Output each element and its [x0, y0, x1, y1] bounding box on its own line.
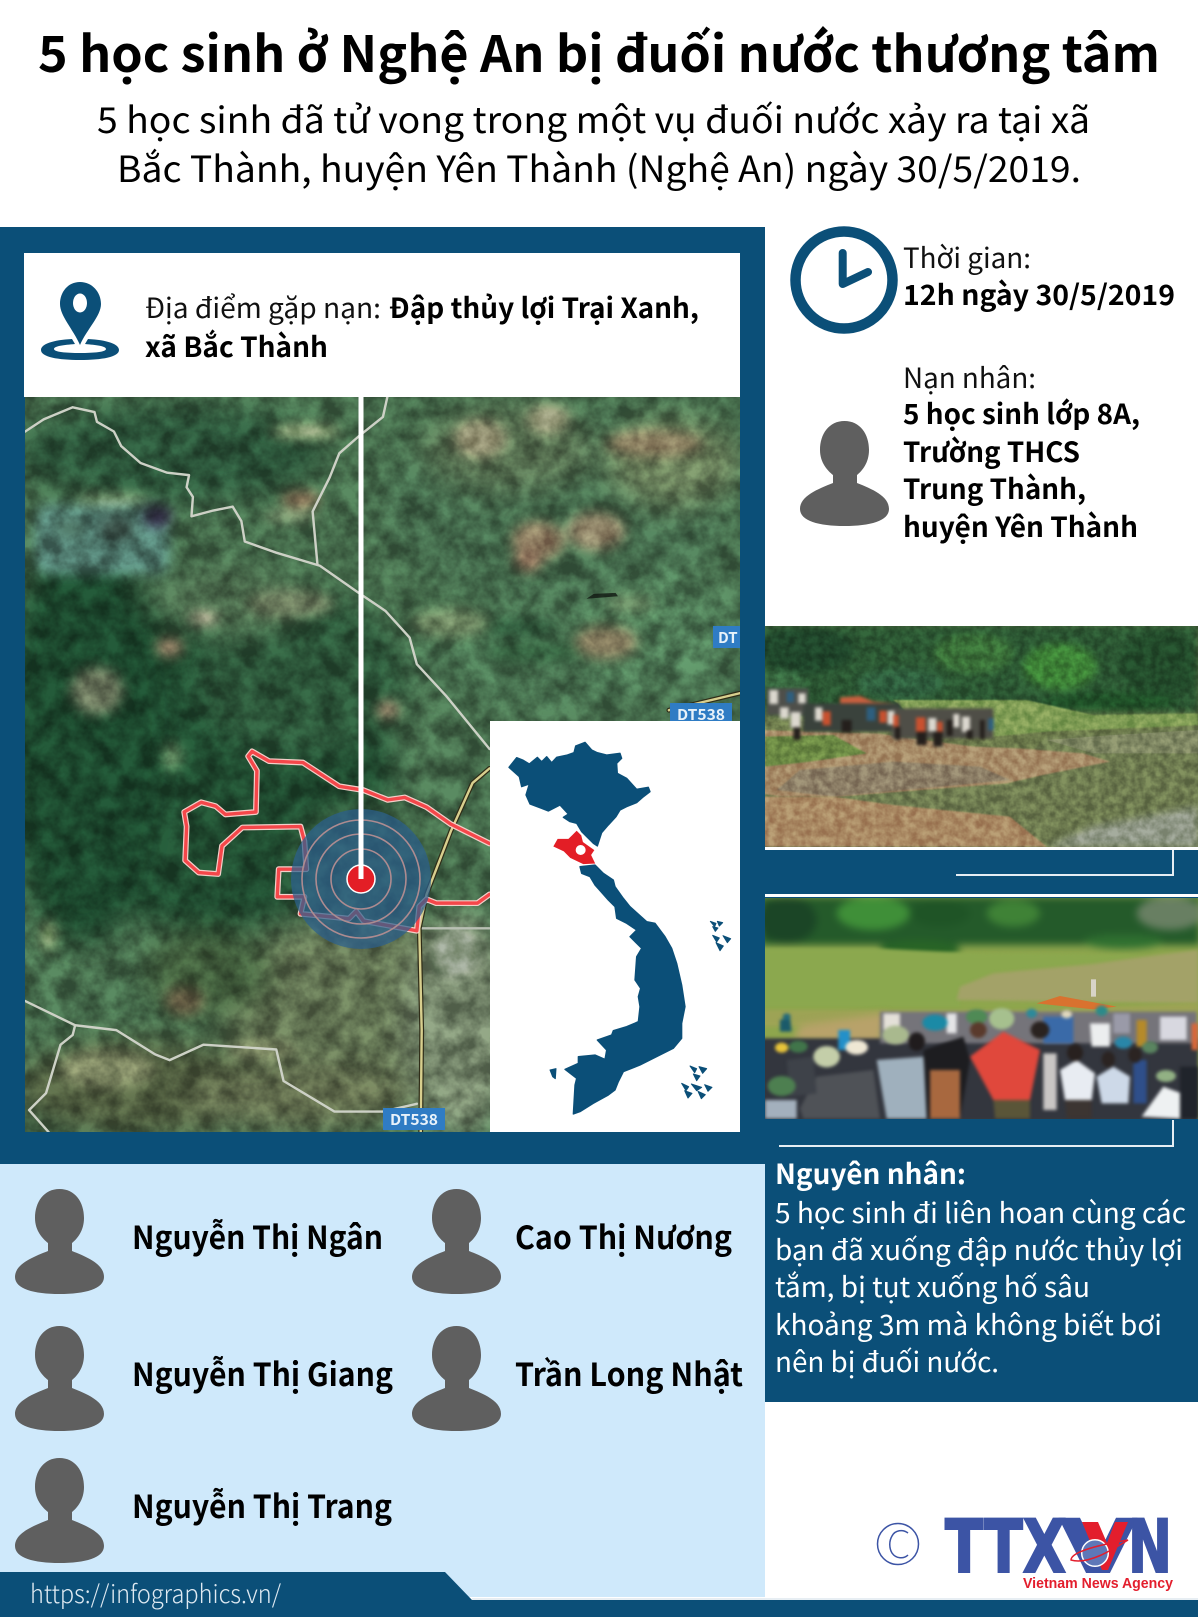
location text	[145, 287, 699, 366]
icon: victim person	[800, 421, 889, 526]
subtitle	[97, 92, 1090, 193]
victim: Cao Thị Nương	[412, 1189, 732, 1294]
victim: Nguyễn Thị Trang: Nguyễn Thị Trang	[132, 1482, 392, 1528]
photo: crowd on the lake bank	[753, 620, 1198, 853]
victim: Trần Long Nhật	[412, 1326, 743, 1431]
cause text: bạn đã xuống đập nước thủy lợi	[775, 1229, 1183, 1269]
road labels: DT	[718, 627, 738, 648]
panel: victims list background	[0, 1164, 765, 1597]
footer white rule	[472, 1598, 1198, 1600]
logo: TTXVN: Vietnam News Agency	[1023, 1575, 1174, 1592]
crowd	[765, 1005, 1198, 1119]
cause text: 5 học sinh đi liên hoan cùng các	[775, 1192, 1186, 1232]
satellite map	[0, 395, 742, 1137]
subtitle: 5 học sinh đã tử vong trong một vụ đuối nước xảy ra tại xã	[97, 92, 1090, 144]
map: Nghe An province highlighted	[553, 830, 596, 865]
panel: right navy column	[765, 626, 1198, 1402]
commune boundary	[184, 751, 490, 931]
photo: crowd watching the rescue	[757, 897, 1198, 1122]
icon: clock	[796, 232, 892, 328]
crowd figures	[767, 688, 994, 747]
victim: Trần Long Nhật: Trần Long Nhật	[515, 1350, 743, 1396]
logo: TTXVN: N	[1128, 1505, 1172, 1590]
cause text	[775, 1153, 1186, 1381]
panel: Vietnam inset map	[490, 721, 740, 1132]
location text: xã Bắc Thành	[145, 326, 328, 366]
map: islands	[550, 921, 731, 1099]
logo: TTXVN: TTX	[945, 1505, 1066, 1590]
highway	[419, 693, 740, 1134]
victim: Nguyễn Thị Ngân	[15, 1189, 383, 1294]
victims text	[903, 357, 1140, 546]
victim: Nguyễn Thị Giang: Nguyễn Thị Giang	[132, 1350, 393, 1396]
location text: Địa điểm gặp nạn:	[145, 287, 381, 327]
road labels: DT538	[677, 704, 725, 725]
logo: TTXVN	[945, 1505, 1174, 1592]
footer band	[0, 1572, 1198, 1617]
time text: 12h ngày 30/5/2019	[903, 274, 1175, 314]
cause text: Nguyên nhân:	[775, 1153, 966, 1193]
title: 5 học sinh ở Nghệ An bị đuối nước thương tâm	[38, 15, 1160, 87]
victim: Nguyễn Thị Ngân: Nguyễn Thị Ngân	[132, 1213, 383, 1259]
icon: map pin	[41, 282, 119, 360]
road labels: DT538	[390, 1109, 438, 1130]
victims text: 5 học sinh lớp 8A,	[903, 393, 1140, 433]
location marker with radar rings	[291, 397, 431, 949]
copyright symbol	[878, 1524, 918, 1564]
logo: TTXVN: V	[1060, 1505, 1137, 1590]
map: central and southern Vietnam	[565, 865, 685, 1114]
roads	[25, 395, 490, 1132]
divider lines	[765, 848, 1198, 1146]
panel: map frame	[0, 227, 765, 1164]
subtitle: Bắc Thành, huyện Yên Thành (Nghệ An) ngày 30/5/2019.	[117, 141, 1081, 193]
victims text: huyện Yên Thành	[903, 506, 1138, 546]
panel: location label	[24, 253, 740, 400]
victim: Cao Thị Nương: Cao Thị Nương	[515, 1213, 732, 1259]
road labels	[383, 626, 740, 1130]
map: northern Vietnam	[509, 742, 650, 846]
footer url: https://infographics.vn/	[30, 1575, 281, 1611]
time text	[903, 237, 1175, 314]
cause text: nên bị đuối nước.	[775, 1341, 999, 1381]
victims text: Trường THCS	[903, 431, 1080, 471]
victim: Nguyễn Thị Giang	[15, 1326, 393, 1431]
victims text: Trung Thành,	[903, 468, 1086, 508]
time text: Thời gian:	[903, 237, 1031, 277]
cause text: tắm, bị tụt xuống hố sâu	[775, 1266, 1090, 1306]
victim: Nguyễn Thị Trang	[15, 1458, 392, 1563]
cause text: khoảng 3m mà không biết bơi	[775, 1304, 1162, 1344]
location text: Đập thủy lợi Trại Xanh,	[389, 287, 699, 327]
victims text: Nạn nhân:	[903, 357, 1036, 397]
